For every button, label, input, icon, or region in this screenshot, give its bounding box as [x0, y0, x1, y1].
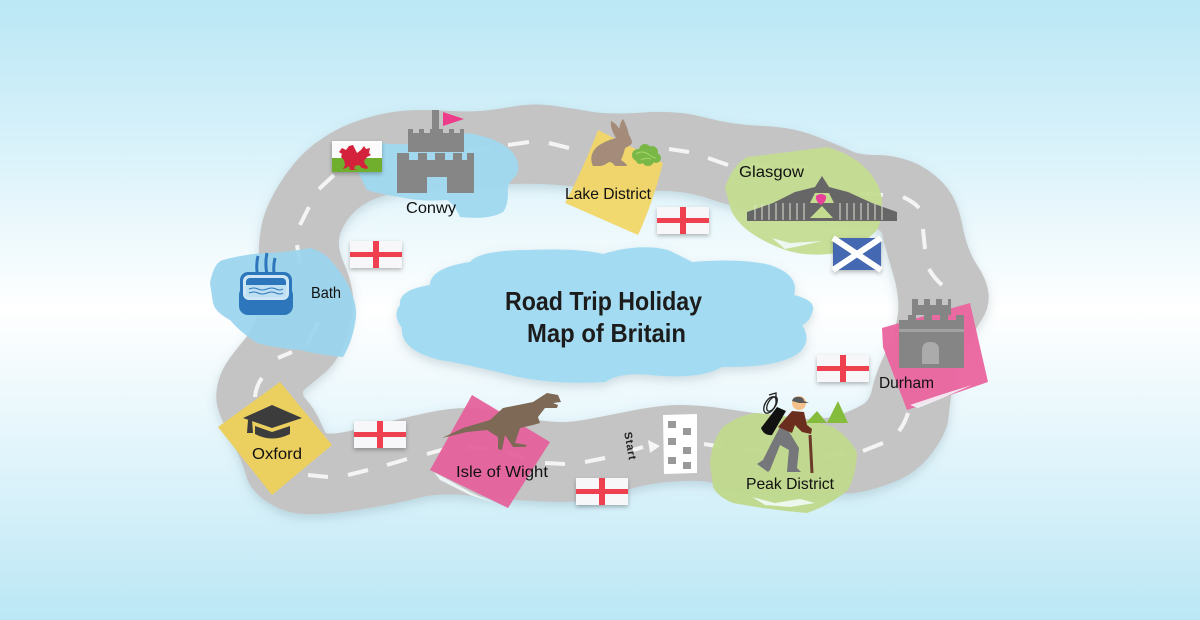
- label: Peak District: Peak District: [746, 476, 835, 493]
- patch: Oxford: [218, 382, 332, 495]
- flag: England (Bath): [350, 241, 402, 268]
- start arrow: [648, 440, 660, 453]
- road centre dashes: [255, 142, 942, 477]
- patch: Bath: [210, 248, 356, 357]
- label: Bath: Bath: [311, 285, 341, 302]
- patch: Lake District: [565, 130, 663, 235]
- label: Conwy: Conwy: [406, 200, 456, 217]
- icon: graduation cap: [243, 405, 302, 438]
- title: Road Trip Holiday: [505, 286, 702, 316]
- label: Durham: Durham: [879, 375, 934, 392]
- label: Lake District: Lake District: [565, 186, 652, 203]
- patch: Conwy: [357, 133, 518, 218]
- label: Isle of Wight: Isle of Wight: [456, 464, 549, 481]
- flag: England (Start): [576, 478, 628, 505]
- icon: start building: [663, 414, 697, 474]
- brush streaks on patches: [434, 238, 972, 507]
- icon: Conwy castle: [397, 110, 474, 193]
- icon: Bath spa: [239, 253, 293, 315]
- label: Glasgow: Glasgow: [739, 164, 804, 181]
- flag: England (Durham): [817, 355, 869, 382]
- start label: Start: [621, 431, 638, 461]
- flag: Scotland: [833, 238, 881, 270]
- flag: Wales: [332, 141, 382, 172]
- flag: England (Lake District): [657, 207, 709, 234]
- patch: Durham: [882, 303, 988, 410]
- icon: T-rex: [442, 393, 561, 450]
- title cloud: [396, 247, 813, 383]
- flag: England (Oxford): [354, 421, 406, 448]
- icon: Kibble Palace, Glasgow: [747, 176, 897, 221]
- patch: Peak District: [710, 413, 857, 513]
- patch: Isle of Wight: [430, 395, 550, 508]
- label: Oxford: Oxford: [252, 446, 302, 463]
- title: Map of Britain: [527, 318, 686, 348]
- patch: Glasgow: [725, 147, 882, 255]
- icon: hiker: [757, 393, 848, 473]
- road loop: [216, 104, 989, 514]
- icon: Rabbit and lettuce: [591, 119, 661, 166]
- title: [505, 286, 702, 348]
- icon: Durham tower: [899, 299, 964, 368]
